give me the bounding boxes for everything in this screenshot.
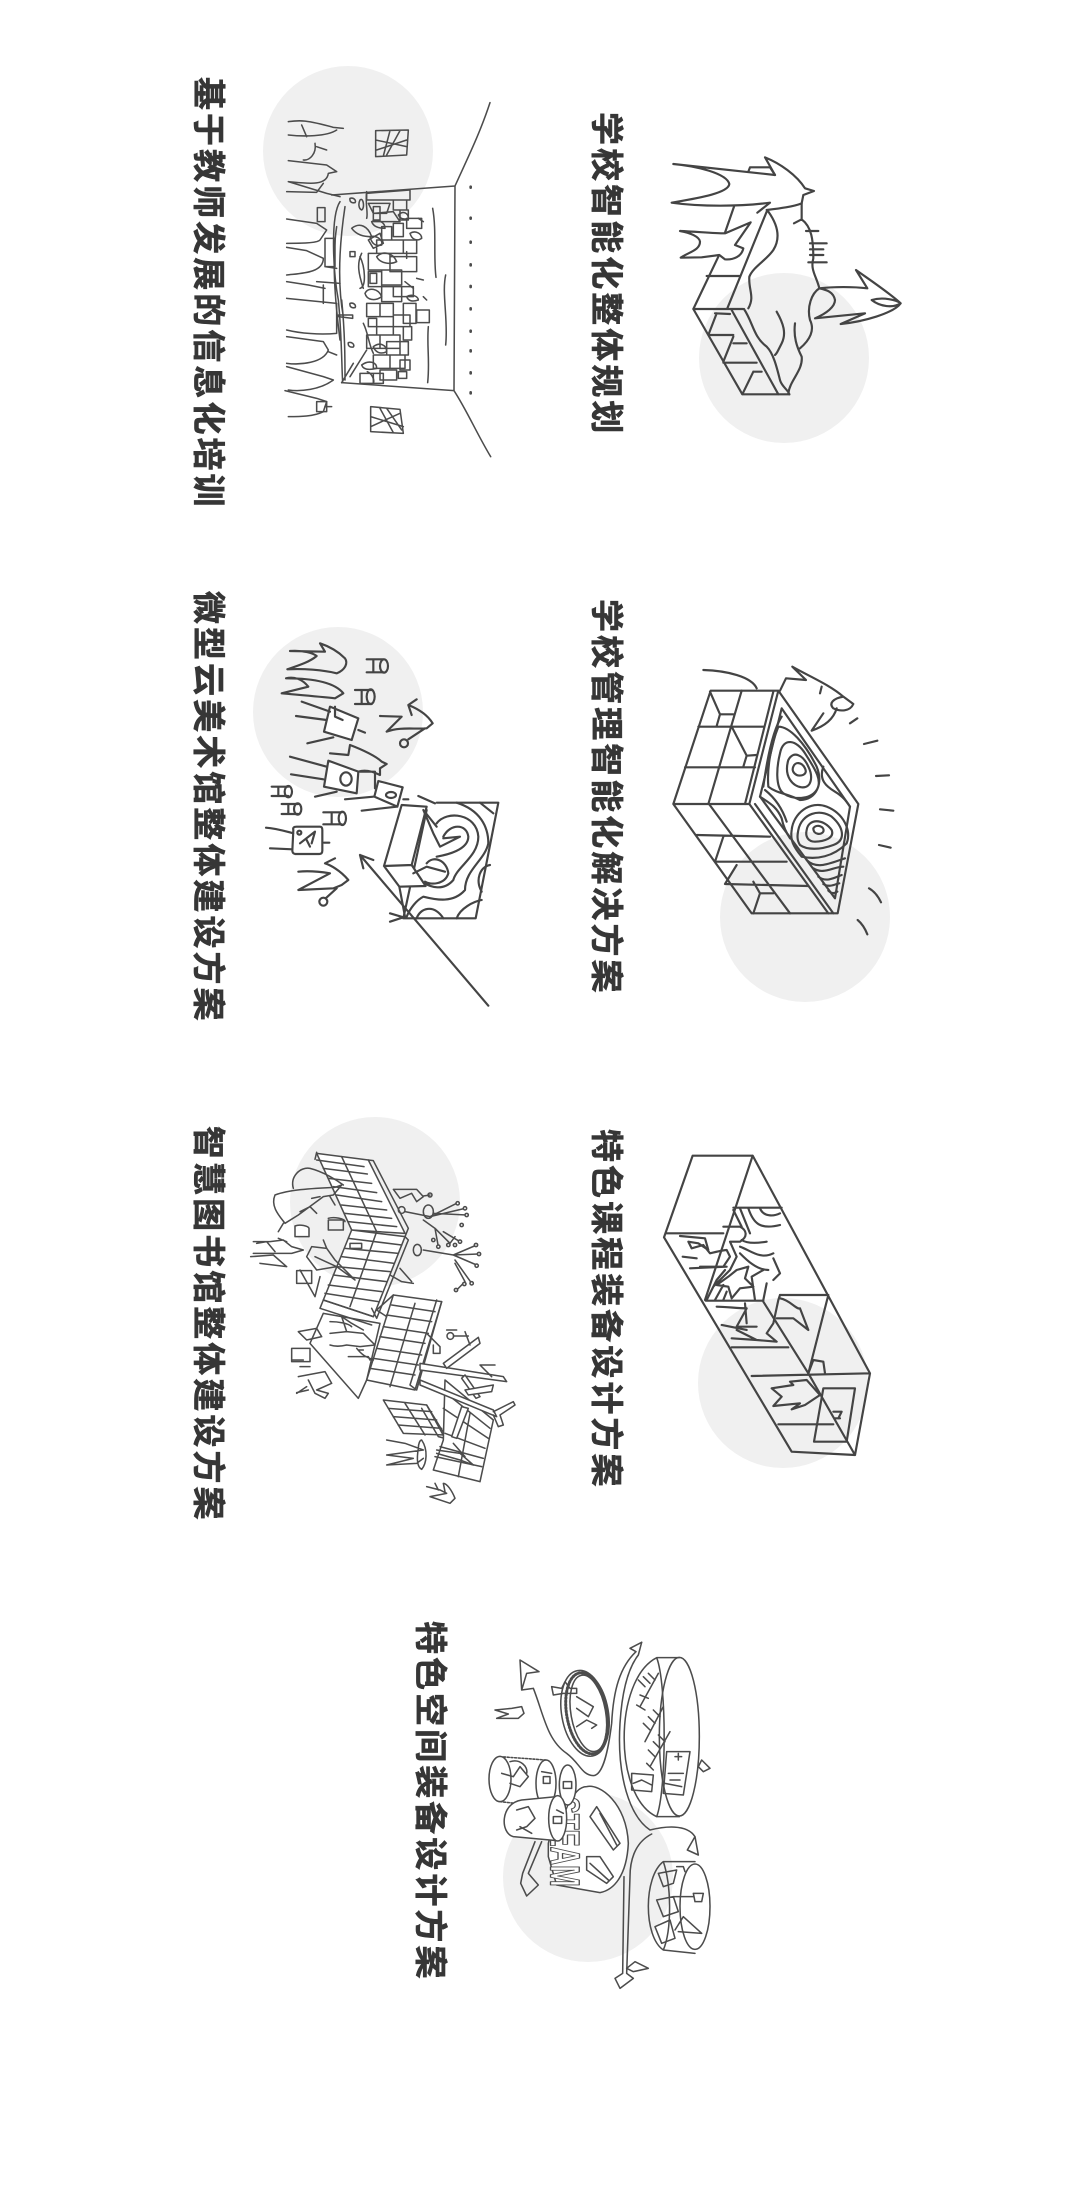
background circle — [253, 627, 423, 797]
heading: 学校管理智能化解决方案 — [588, 599, 625, 996]
background circle — [263, 66, 433, 236]
heading: 基于教师发展的信息化培训 — [190, 77, 227, 510]
illustration: long box with star relief — [664, 1156, 870, 1455]
panel: school management — [588, 599, 893, 1002]
panel: special spaces — [412, 1621, 710, 1988]
illustration: cylinders and arrows — [489, 1642, 710, 1988]
background circle — [503, 1792, 673, 1962]
panel: special curriculum — [588, 1129, 870, 1490]
background circle — [699, 273, 869, 443]
background circle — [698, 1298, 868, 1468]
background circle — [720, 832, 890, 1002]
background circle — [290, 1117, 460, 1287]
heading: 智慧图书馆整体建设方案 — [190, 1126, 227, 1523]
panel: school smart planning — [588, 112, 901, 443]
illustration: training room — [285, 103, 491, 457]
heading: 微型云美术馆整体建设方案 — [190, 591, 227, 1024]
illustration: stacked box with birds — [672, 157, 901, 394]
panel: smart library — [190, 1117, 515, 1523]
panel: teacher training — [190, 66, 491, 510]
illustration: topographic box — [673, 667, 893, 934]
illustration: museum pieces — [266, 643, 498, 1006]
illustration: library buildings — [251, 1152, 515, 1503]
heading: 特色课程装备设计方案 — [588, 1129, 625, 1490]
lettering on cylinder: STEAM — [542, 1797, 589, 1887]
heading: 特色空间装备设计方案 — [412, 1621, 449, 1982]
heading: 学校智能化整体规划 — [588, 112, 625, 436]
panel: micro cloud art museum — [190, 591, 498, 1024]
